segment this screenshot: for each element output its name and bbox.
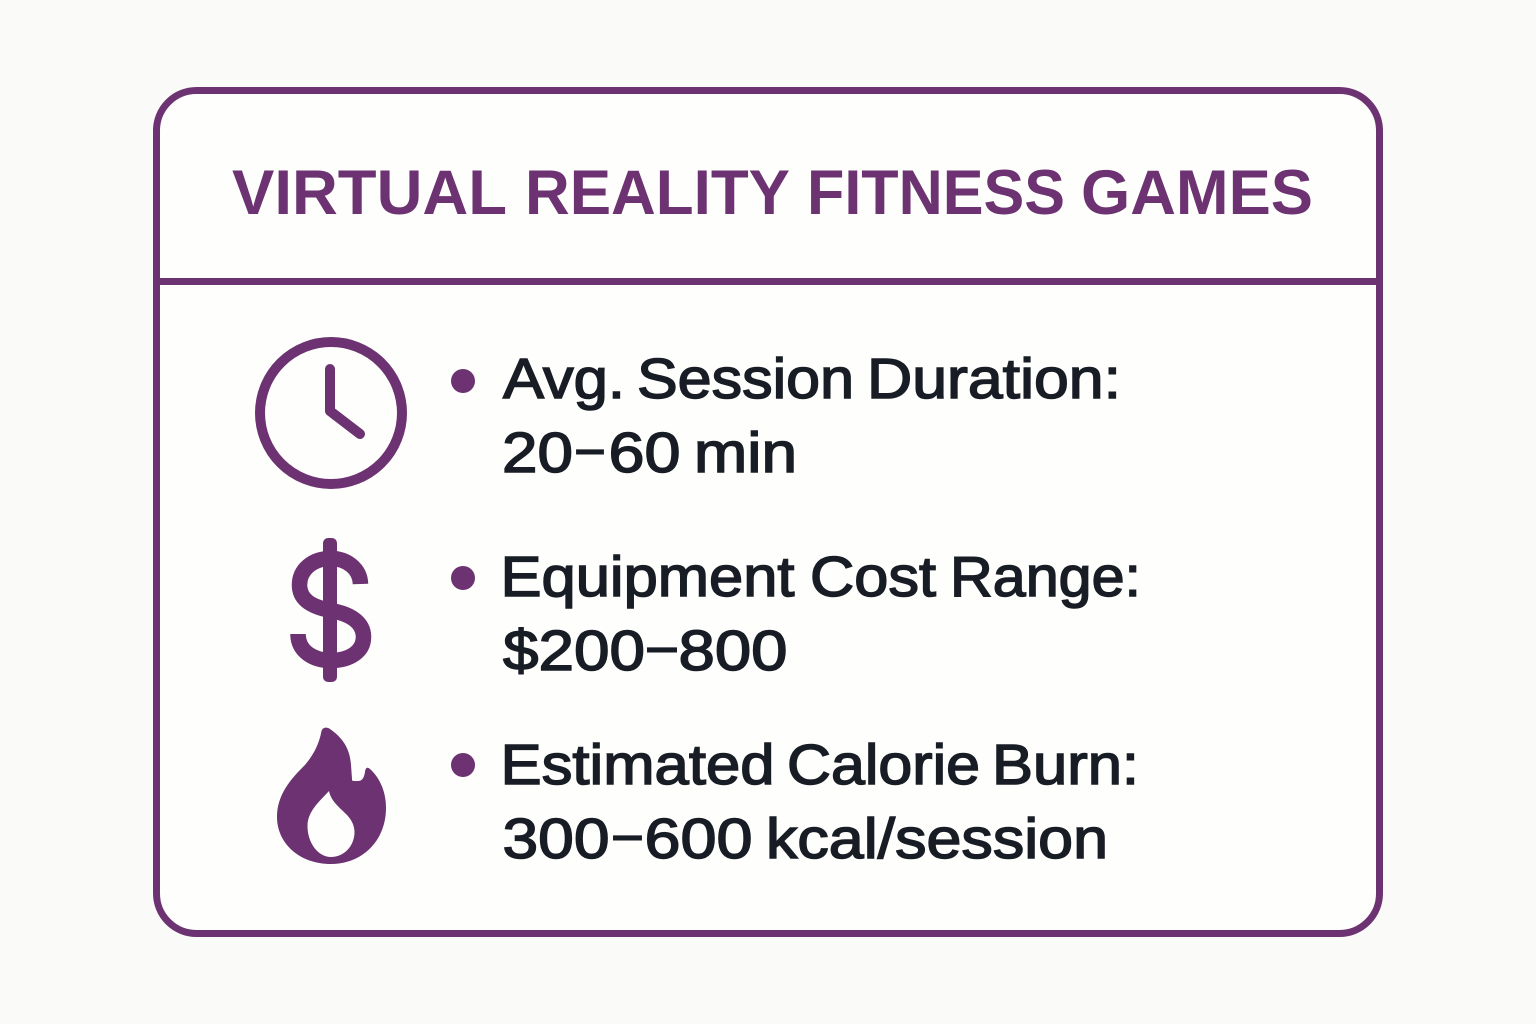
list item: session duration: 20 (502, 421, 573, 485)
icon: flame (277, 728, 386, 864)
list item: calorie burn: Estimated (500, 733, 774, 797)
title: VIRTUAL (232, 158, 507, 228)
icon: dollar sign (298, 538, 364, 682)
list item: equipment cost: – (648, 619, 677, 672)
title: REALITY (525, 158, 790, 228)
list item: calorie burn: Burn: (992, 733, 1139, 797)
list item: equipment cost: Equipment (500, 545, 795, 609)
list item: calorie burn: 300 (502, 807, 610, 871)
list item: equipment cost: Cost (810, 545, 936, 609)
list item: session duration: Duration: (867, 347, 1121, 411)
list item: session duration: 60 (608, 421, 680, 485)
list item: equipment cost: $200 (503, 619, 645, 683)
list item: equipment cost (451, 545, 1141, 683)
panel: main card (156, 90, 1380, 934)
list item: session duration: min (694, 421, 797, 485)
list item: calorie burn: 600 (644, 807, 752, 871)
list item: equipment cost: 800 (678, 619, 788, 683)
title: GAMES (1081, 158, 1313, 228)
list item: calorie burn: Calorie (787, 733, 980, 797)
list item: session duration: Avg. (503, 347, 625, 411)
icon: clock (260, 342, 402, 484)
list item: session duration: – (577, 421, 604, 474)
title (232, 158, 1313, 228)
list item: calorie burn: kcal/session (766, 807, 1108, 871)
list item: session duration: Session (637, 347, 854, 411)
title: FITNESS (807, 158, 1065, 228)
list item: calorie burn (451, 733, 1139, 871)
list item: equipment cost: Range: (950, 545, 1141, 609)
list item: session duration (451, 347, 1121, 485)
list item: calorie burn: – (614, 807, 642, 860)
